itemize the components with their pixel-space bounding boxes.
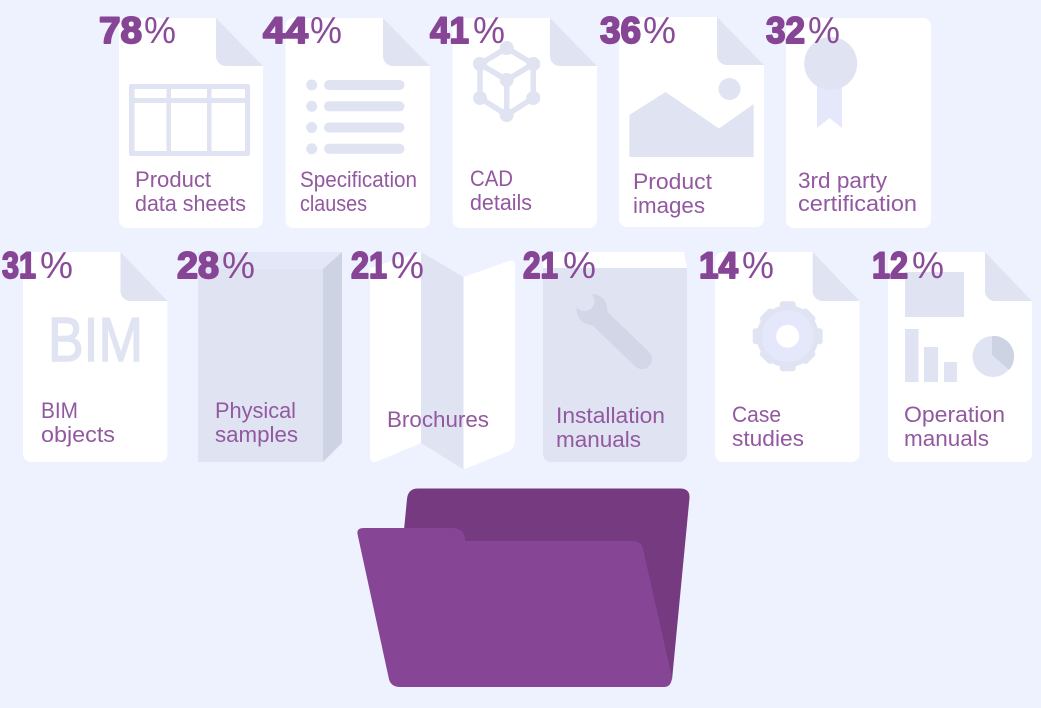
percentage: 41% bbox=[430, 10, 505, 51]
percentage: 14%: 14 bbox=[699, 245, 738, 286]
percentage: 36%: % bbox=[643, 10, 676, 51]
panel: brochures bbox=[351, 245, 515, 470]
label: BIM objects: objects bbox=[41, 422, 115, 447]
label: BIM objects bbox=[41, 398, 115, 447]
label: specification clauses: Specification bbox=[300, 167, 417, 192]
panel: product images bbox=[600, 10, 764, 227]
label: product data sheets: Product bbox=[135, 167, 211, 192]
label: specification clauses bbox=[300, 167, 417, 216]
label: case studies: studies bbox=[732, 426, 804, 451]
label: installation manuals: Installation bbox=[556, 403, 665, 428]
label: physical samples: samples bbox=[215, 422, 298, 447]
icon: landscape image bbox=[629, 78, 754, 157]
percentage: 21%: % bbox=[563, 245, 596, 286]
percentage: 28% bbox=[177, 245, 255, 286]
percentage: 78%: % bbox=[144, 10, 176, 51]
percentage: 44% bbox=[263, 10, 342, 51]
icon: cube bbox=[473, 41, 540, 122]
percentage: 78% bbox=[99, 10, 176, 51]
panel: installation manuals bbox=[523, 245, 687, 462]
label: physical samples: Physical bbox=[215, 398, 296, 423]
icon: folder bbox=[357, 488, 690, 687]
label: case studies: Case bbox=[732, 402, 781, 427]
label: 3rd party certification bbox=[798, 168, 917, 216]
percentage: 32% bbox=[766, 10, 840, 51]
label: specification clauses: clauses bbox=[300, 191, 367, 216]
label: operation manuals: Operation bbox=[904, 402, 1005, 427]
label: case studies bbox=[732, 402, 804, 451]
label: product data sheets: data sheets bbox=[135, 191, 246, 216]
panel: 3rd party certification bbox=[766, 10, 931, 228]
percentage: 21% bbox=[523, 245, 596, 286]
percentage: 31%: 31 bbox=[2, 245, 36, 286]
panel: operation manuals bbox=[872, 245, 1032, 462]
panel: BIM objects bbox=[2, 245, 168, 462]
label: product images: Product bbox=[633, 169, 712, 194]
label: product data sheets bbox=[135, 167, 246, 216]
percentage: 21% bbox=[351, 245, 424, 286]
label: CAD details: CAD bbox=[470, 166, 513, 191]
percentage: 12% bbox=[872, 245, 944, 286]
percentage: 31%: % bbox=[40, 245, 73, 286]
label: installation manuals: manuals bbox=[556, 427, 641, 452]
icon: list bbox=[306, 80, 404, 154]
panel: case studies bbox=[699, 245, 860, 462]
percentage: 28%: % bbox=[222, 245, 255, 286]
percentage: 21%: 21 bbox=[523, 245, 558, 286]
panel: physical samples bbox=[177, 245, 342, 462]
percentage: 36% bbox=[600, 10, 676, 51]
label: CAD details: details bbox=[470, 190, 532, 215]
percentage: 28%: 28 bbox=[177, 245, 219, 286]
percentage: 12%: % bbox=[912, 245, 944, 286]
icon: BIM letters: BIM bbox=[48, 306, 143, 375]
percentage: 44%: 44 bbox=[263, 10, 308, 51]
label: 3rd party certification: certification bbox=[798, 191, 917, 216]
panel: specification clauses bbox=[263, 10, 430, 228]
label: physical samples bbox=[215, 398, 298, 447]
icon: report charts bbox=[905, 272, 1014, 382]
percentage: 14% bbox=[699, 245, 774, 286]
icon: wrench bbox=[574, 291, 642, 359]
label: 3rd party certification: 3rd party bbox=[798, 168, 887, 193]
percentage: 36%: 36 bbox=[600, 10, 641, 51]
percentage: 21%: % bbox=[391, 245, 424, 286]
panel: CAD details bbox=[430, 10, 597, 228]
percentage: 12%: 12 bbox=[872, 245, 908, 286]
percentage: 14%: % bbox=[742, 245, 774, 286]
percentage: 21%: 21 bbox=[351, 245, 387, 286]
percentage: 44%: % bbox=[310, 10, 342, 51]
panel: product data sheets bbox=[99, 10, 263, 228]
icon: gear bbox=[753, 301, 823, 371]
label: operation manuals bbox=[904, 402, 1005, 451]
percentage: 41%: 41 bbox=[430, 10, 469, 51]
percentage: 32%: % bbox=[808, 10, 840, 51]
icon: table bbox=[129, 84, 250, 156]
label: operation manuals: manuals bbox=[904, 426, 989, 451]
percentage: 41%: % bbox=[473, 10, 505, 51]
percentage: 31% bbox=[2, 245, 73, 286]
label: CAD details bbox=[470, 166, 532, 215]
icon: rosette bbox=[804, 37, 857, 128]
label: product images bbox=[633, 169, 712, 218]
label: BIM objects: BIM bbox=[41, 398, 78, 423]
percentage: 32%: 32 bbox=[766, 10, 805, 51]
label: brochures: Brochures bbox=[387, 407, 489, 432]
label: installation manuals bbox=[556, 403, 665, 452]
percentage: 78%: 78 bbox=[99, 10, 142, 51]
label: product images: images bbox=[633, 193, 705, 218]
